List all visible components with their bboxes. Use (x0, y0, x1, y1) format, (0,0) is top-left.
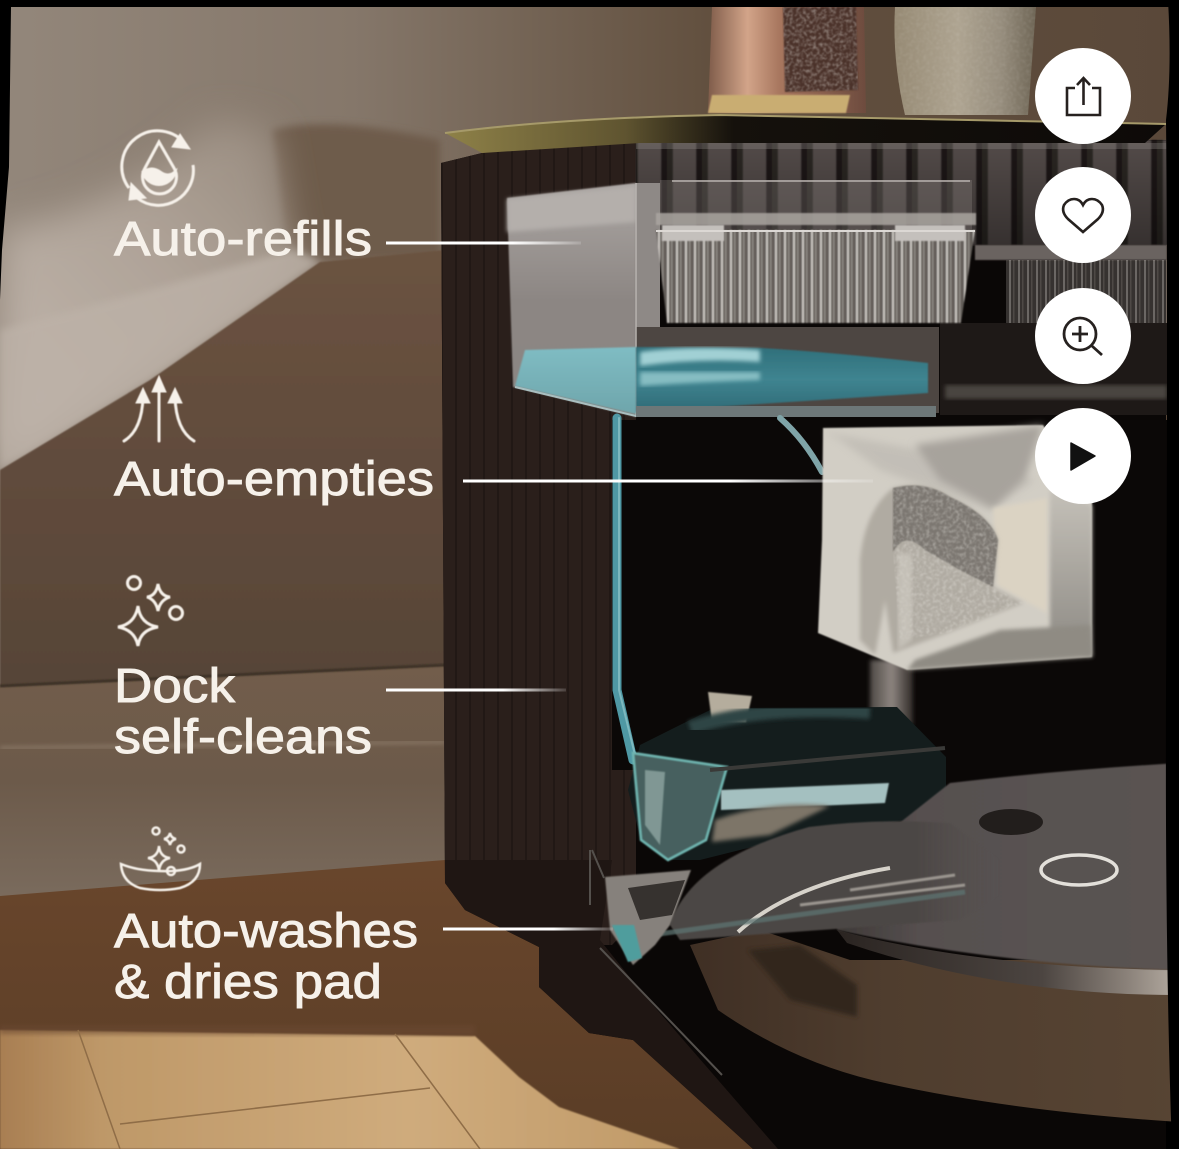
robot sensor (979, 809, 1043, 835)
water tank (507, 180, 976, 417)
label: Auto-empties (114, 453, 873, 506)
button: play (1035, 408, 1131, 504)
cleaning tray (628, 692, 946, 860)
dust pile (860, 485, 1023, 655)
label: Auto-empties: Auto-empties (114, 453, 434, 506)
icon: upward arrows (124, 376, 194, 441)
dock body (441, 140, 1168, 1149)
label: Auto-refills (114, 213, 581, 266)
pad wash tray (590, 850, 722, 1075)
button: zoom (1035, 288, 1131, 384)
label: Dock self-cleans (114, 660, 566, 764)
label: Dock self-cleans: Dock (114, 660, 236, 713)
icon: refill drop with arrows (122, 131, 193, 205)
mop pad (637, 821, 1000, 940)
label: Dock self-cleans: self-cleans (114, 711, 372, 764)
copper vase (708, 7, 866, 113)
water pipes (617, 418, 822, 760)
bumper slot (748, 945, 857, 1017)
dust bag (818, 425, 1092, 670)
pillar under bag (870, 660, 913, 725)
icon: washing pad bowl (121, 828, 200, 890)
water (515, 347, 928, 414)
label: Auto-washes & dries pad (114, 905, 613, 1009)
label: Auto-refills: Auto-refills (114, 213, 372, 266)
shelf plate (445, 115, 1166, 153)
label: Auto-washes & dries pad: Auto-washes (114, 905, 418, 958)
button: favourite (1035, 167, 1131, 263)
label: Auto-washes & dries pad: & dries pad (114, 956, 382, 1009)
robot vacuum (690, 763, 1179, 1122)
button: share (1035, 48, 1131, 144)
robot light ring (1041, 855, 1117, 885)
cream vase (894, 7, 1036, 115)
icon: sparkles (118, 576, 182, 646)
second tank behind buttons (940, 245, 1167, 415)
